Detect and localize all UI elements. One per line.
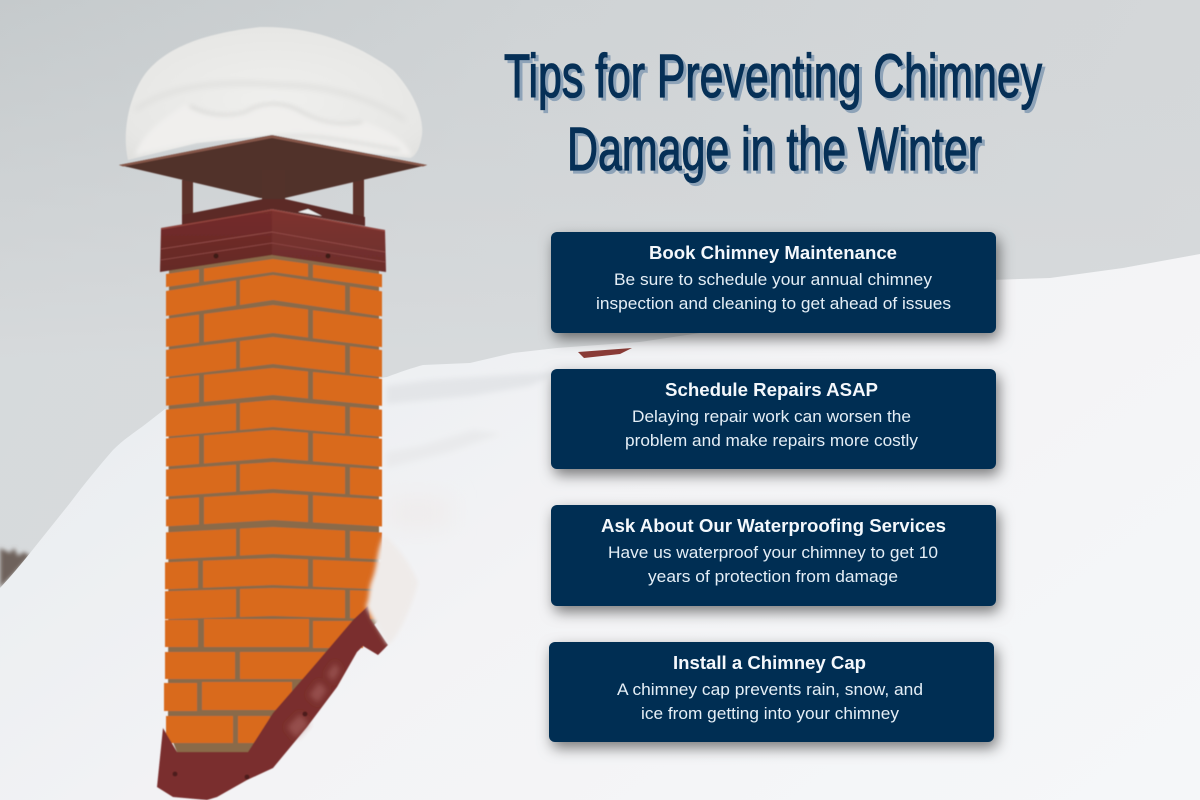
mortar backing xyxy=(168,252,379,752)
card: Book Chimney Maintenance: inspection and cleaning to get ahead of issues xyxy=(596,294,951,313)
card: Install a Chimney Cap xyxy=(549,642,994,742)
card: Book Chimney Maintenance: Book Chimney Maintenance xyxy=(649,243,897,263)
card: Ask About Our Waterproofing Services: years of protection from damage xyxy=(648,567,898,586)
distant tree xyxy=(0,548,30,588)
metal collar band xyxy=(160,209,386,272)
card: Install a Chimney Cap: ice from getting into your chimney xyxy=(641,704,900,723)
card: Install a Chimney Cap: A chimney cap prevents rain, snow, and xyxy=(617,680,923,699)
metal flashing xyxy=(157,606,388,800)
card: Book Chimney Maintenance xyxy=(551,232,996,333)
snow covered roof xyxy=(0,254,1200,800)
snow drift beside chimney xyxy=(366,535,418,645)
card: Ask About Our Waterproofing Services: Have us waterproof your chimney to get 10 xyxy=(608,543,938,562)
chimney cap snow xyxy=(126,27,422,160)
metal hood xyxy=(119,135,427,226)
card: Book Chimney Maintenance: Be sure to schedule your annual chimney xyxy=(614,270,933,289)
title xyxy=(504,42,1042,183)
card: Schedule Repairs ASAP: Delaying repair work can worsen the xyxy=(632,407,911,426)
card: Ask About Our Waterproofing Services xyxy=(551,505,996,606)
card: Schedule Repairs ASAP: problem and make repairs more costly xyxy=(625,431,919,450)
card: Ask About Our Waterproofing Services: Ask About Our Waterproofing Services xyxy=(601,516,946,536)
card: Schedule Repairs ASAP xyxy=(551,369,996,469)
card: Schedule Repairs ASAP: Schedule Repairs ASAP xyxy=(665,380,878,400)
chimney xyxy=(119,27,427,800)
card: Install a Chimney Cap: Install a Chimney Cap xyxy=(673,653,866,673)
title: Damage in the Winter xyxy=(567,115,982,183)
brick courses xyxy=(164,259,382,743)
